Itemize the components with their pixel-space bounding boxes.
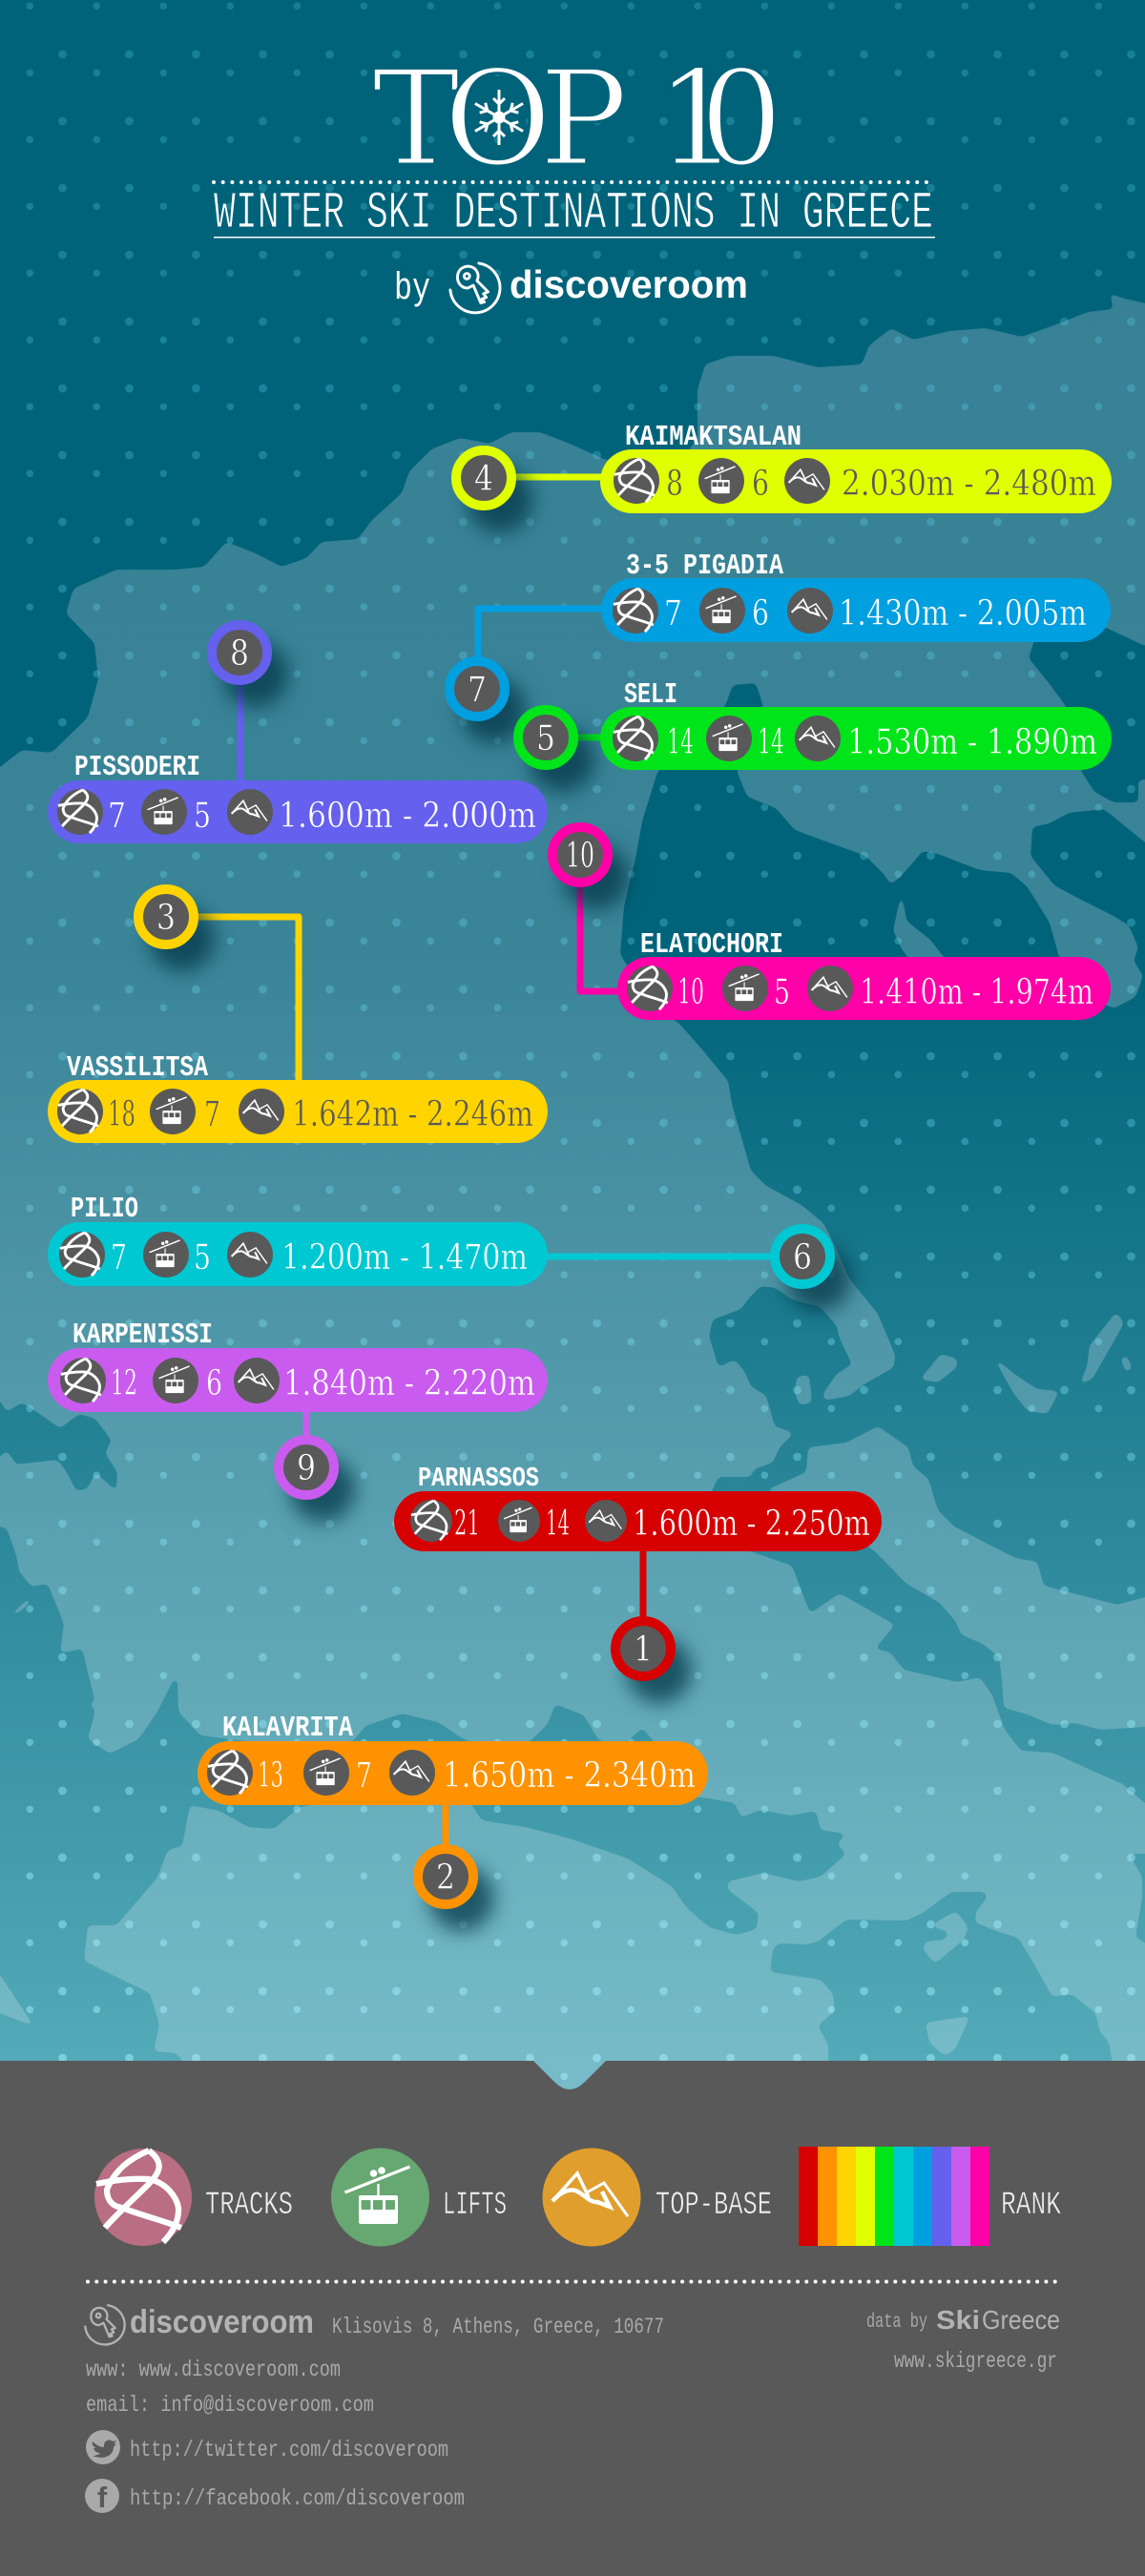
- website: www: www.discoveroom.com: [86, 2358, 341, 2382]
- icon: discoveroom key: [450, 263, 500, 313]
- label: 3-5 PIGADIA: [626, 550, 783, 583]
- pill: [600, 707, 1112, 770]
- stats: 7: [664, 594, 682, 634]
- legend: rank colour bars: RANK: [1001, 2188, 1061, 2224]
- stats: 1.530m - 1.890m: [847, 723, 1097, 762]
- legend: lifts: [331, 2149, 507, 2246]
- stats: [627, 966, 1093, 1012]
- rank marker: [518, 710, 573, 765]
- pill: [601, 578, 1111, 642]
- legend: tracks: TRACKS: [205, 2188, 293, 2224]
- destination 1: Parnassos: [394, 1463, 882, 1676]
- stats: 14: [546, 1505, 570, 1544]
- stats: [59, 1232, 528, 1278]
- rank marker: [279, 1440, 334, 1495]
- stats: 7: [204, 1095, 220, 1134]
- footer contact block: [85, 2304, 664, 2514]
- byline with discoveroom logo: [394, 262, 748, 313]
- email: email: info@discoveroom.com: [86, 2393, 374, 2418]
- connector: [510, 473, 611, 481]
- subtitle underline: [214, 237, 935, 239]
- stats: [57, 789, 536, 836]
- heading dotted rule: [214, 180, 935, 184]
- stats: 6: [206, 1364, 222, 1403]
- legend: lifts: LIFTS: [443, 2188, 507, 2224]
- rank marker: [449, 661, 505, 717]
- label: KAIMAKTSALAN: [625, 421, 802, 454]
- sea: Saronic gulf: [770, 1892, 1114, 2075]
- stats: [410, 1500, 870, 1544]
- footer panel with notch: [0, 2061, 1145, 2576]
- rank marker: [775, 1229, 830, 1284]
- stats: [57, 1089, 533, 1134]
- rank marker: [552, 827, 608, 883]
- map: islands: [0, 891, 1133, 2056]
- rank marker: 10: [566, 837, 594, 876]
- pill: [48, 1080, 548, 1143]
- stats: 8: [666, 465, 683, 504]
- stats: [614, 458, 1096, 504]
- byline with discoveroom logo: by: [394, 268, 430, 311]
- sea: gulf behind Seli: [1029, 627, 1145, 802]
- data credit: Ski: [936, 2305, 980, 2335]
- icon: snowflake: [472, 90, 526, 145]
- connector: [572, 735, 611, 740]
- stats: [207, 1750, 696, 1796]
- stats: 7: [108, 797, 126, 836]
- twitter link: http://twitter.com/discoveroom: [130, 2438, 448, 2462]
- rank marker: 4: [474, 460, 493, 499]
- stats: 1.600m - 2.250m: [633, 1505, 870, 1544]
- label: VASSILITSA: [67, 1051, 208, 1085]
- connector: [443, 1798, 448, 1851]
- rank marker: 2: [436, 1859, 455, 1898]
- destination 3: Vassilitsa: [48, 889, 548, 1143]
- sea: Ionian and Gulf of Corinth: [0, 1525, 846, 2075]
- stats: 1.600m - 2.000m: [279, 797, 536, 836]
- sea: Amvrakikos gulf: [0, 1395, 117, 1491]
- sea: north: [0, 0, 1145, 778]
- icon: twitter: [86, 2430, 120, 2464]
- footer dotted rule: [88, 2280, 1059, 2284]
- sea: south-east corner: [1129, 1854, 1145, 1956]
- stats: 10: [677, 973, 704, 1012]
- stats: 7: [356, 1756, 372, 1796]
- icon: facebook: f: [97, 2481, 108, 2514]
- rank marker: [615, 1621, 671, 1676]
- stats: 12: [111, 1364, 137, 1403]
- stats: 1.840m - 2.220m: [283, 1364, 535, 1403]
- byline with discoveroom logo: discoveroom: [510, 262, 748, 306]
- data credit: Greece: [982, 2305, 1060, 2335]
- rank marker: [212, 625, 267, 680]
- data credit: www.skigreece.gr: [894, 2349, 1057, 2374]
- stats: 1.642m - 2.246m: [292, 1095, 533, 1134]
- destination 6: Pilio: [48, 1193, 830, 1286]
- pill: [48, 1222, 548, 1286]
- icon: facebook: [85, 2479, 119, 2514]
- destination 10: Elatochori: [552, 827, 1111, 1020]
- label: PARNASSOS: [418, 1463, 539, 1494]
- legend: tracks: [94, 2149, 293, 2246]
- stats: 5: [774, 973, 790, 1012]
- address: Klisovis 8, Athens, Greece, 10677: [332, 2315, 664, 2339]
- data credit: [866, 2305, 1060, 2374]
- rank marker: 6: [793, 1238, 812, 1278]
- facebook link: http://facebook.com/discoveroom: [130, 2486, 465, 2511]
- stats: 2.030m - 2.480m: [842, 465, 1096, 504]
- pill: [617, 957, 1111, 1020]
- pill: [198, 1741, 708, 1805]
- pill: [48, 1348, 548, 1412]
- icon: footer logo: [85, 2305, 125, 2344]
- rank marker: 8: [230, 634, 249, 674]
- stats: 5: [194, 797, 211, 836]
- stats: 1.200m - 1.470m: [281, 1238, 528, 1278]
- stats: 13: [258, 1756, 283, 1796]
- stats: 14: [758, 723, 784, 762]
- rank marker: 3: [156, 899, 176, 938]
- label: ELATOCHORI: [640, 928, 783, 962]
- destination 8: Pissoderi: [48, 625, 548, 843]
- destination 5: Seli: [518, 678, 1112, 770]
- legend: top-base: [542, 2149, 772, 2246]
- rank marker: 5: [536, 719, 555, 758]
- stats: 1.430m - 2.005m: [839, 594, 1087, 634]
- legend: top-base: TOP-BASE: [656, 2188, 772, 2224]
- rank marker: 7: [468, 671, 487, 710]
- footer logo wordmark: discoveroom: [130, 2304, 314, 2340]
- stats: 1.650m - 2.340m: [443, 1756, 696, 1796]
- legend: [94, 2147, 1061, 2246]
- connector: [534, 1254, 778, 1259]
- stats: 5: [194, 1238, 211, 1278]
- connector: [580, 883, 630, 991]
- stats: 14: [667, 723, 694, 762]
- rank marker: [456, 450, 511, 506]
- connector: [639, 1541, 647, 1622]
- rank marker: [138, 889, 194, 945]
- destination 4: Kaimaktsalan: [456, 421, 1112, 513]
- legend: rank colour bars: [799, 2147, 1061, 2246]
- stats: 6: [752, 465, 769, 504]
- stats: 18: [108, 1095, 135, 1134]
- connector: [237, 677, 244, 787]
- label: KARPENISSI: [73, 1319, 213, 1352]
- label: SELI: [624, 678, 677, 712]
- stats: 7: [111, 1238, 127, 1278]
- connector: [478, 609, 611, 668]
- rank marker: 9: [297, 1449, 316, 1488]
- label: KALAVRITA: [222, 1712, 353, 1745]
- destination 9: Karpenissi: [48, 1319, 548, 1495]
- stats: 21: [454, 1505, 480, 1544]
- destination 2: Kalavrita: [198, 1712, 708, 1904]
- destination 7: 3-5 Pigadia: [449, 550, 1111, 717]
- pill: [48, 780, 548, 843]
- connector: [303, 1402, 309, 1441]
- rank marker: 1: [634, 1631, 653, 1670]
- rank marker: [418, 1849, 473, 1904]
- stats: 6: [752, 594, 769, 634]
- title: TOP 10: TOP 10: [372, 42, 783, 196]
- stats: [60, 1358, 535, 1403]
- label: PILIO: [71, 1193, 138, 1226]
- data credit: data by: [866, 2312, 927, 2334]
- pill: [600, 449, 1112, 513]
- stats: [613, 588, 1087, 634]
- pill: [394, 1491, 882, 1551]
- sea: Aegean: [620, 683, 1145, 1818]
- connector: [191, 917, 299, 1088]
- label: PISSODERI: [74, 751, 200, 784]
- stats: [613, 716, 1097, 762]
